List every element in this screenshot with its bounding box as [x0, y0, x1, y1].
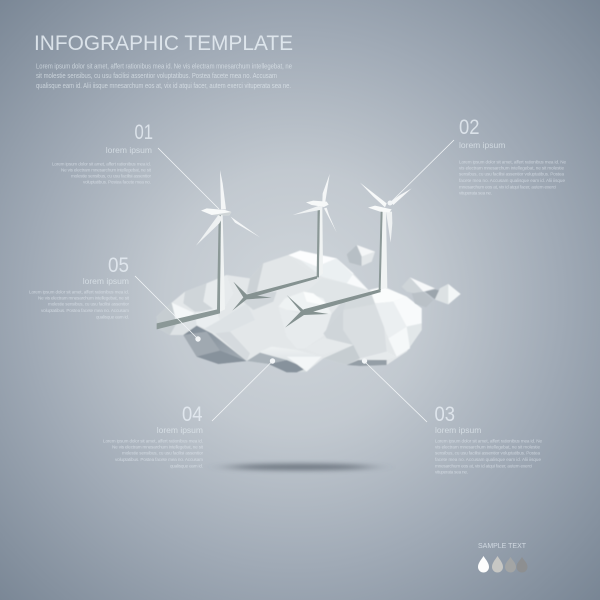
block 01: lorem ipsum — [106, 145, 152, 155]
block 04: molestie sensibus, cu usu facilisi assentior — [122, 450, 203, 456]
block 03: sensibus, cu usu facilisi assentior voluptatibus. Postea — [435, 450, 540, 456]
block 03: lorem ipsum — [435, 425, 481, 435]
turbine 2 — [293, 174, 337, 277]
block 05: qualisque eam id. — [96, 314, 129, 320]
ground shadow — [228, 464, 372, 470]
block 05: Ne vis electram mnesarchum intellegebat, ne sit — [38, 296, 130, 300]
cloud with wind turbines — [157, 170, 461, 372]
legend: sample text: SAMPLE TEXT — [478, 541, 526, 550]
block 05: lorem ipsum — [83, 276, 129, 286]
intro text block: Lorem ipsum dolor sit amet, affert rationibus mea id. Ne vis electram mnesarchum intellegebat, ne — [36, 64, 292, 70]
block 02: lorem ipsum — [459, 140, 505, 150]
block 04: voluptatibus. Postea facete mea no. Accusam — [115, 457, 203, 462]
block 02: vis electram mnesarchum intellegebat, ne sit molestie — [459, 166, 564, 170]
intro text block: sit molestie sensibus, cu usu facilisi assentior voluptatibus. Postea facete mea no. Accusam — [36, 73, 277, 80]
block 03 — [434, 403, 542, 474]
block 01: voluptatibus. Postea facete mea no. — [83, 180, 151, 184]
block 01: 01 — [134, 121, 153, 144]
leader line 05 — [135, 276, 201, 342]
block 04: lorem ipsum — [157, 425, 203, 435]
block 01: Lorem ipsum dolor sit amet, affert rationibus mea id. — [52, 162, 151, 166]
block 04 — [103, 403, 204, 468]
block 03: mnesarchum eos at, vix id atqui facer, autem exerci — [435, 464, 532, 468]
cable 1 and tail — [157, 309, 220, 329]
intro text block: qualisque eam id. Alii iisque mnesarchum eos at, vix id atqui facer, autem exerci vituperata sea ne. — [36, 83, 291, 90]
block 03: vis electram mnesarchum intellegebat, ne sit molestie — [435, 444, 540, 450]
block 04: 04 — [182, 403, 203, 426]
block 05 — [29, 254, 130, 320]
block 05: Lorem ipsum dolor sit amet, affert rationibus mea id. — [29, 290, 129, 294]
block 05: 05 — [108, 254, 129, 277]
cable 3 with fork — [285, 289, 381, 328]
block 02: sensibus, cu usu facilisi assentior voluptatibus. Postea — [459, 172, 564, 176]
block 01: molestie sensibus, cu usu facilisi assentior — [71, 174, 151, 178]
block 02: Lorem ipsum dolor sit amet, affert rationibus mea id. Ne — [459, 160, 566, 164]
cloud body — [157, 251, 422, 372]
small cloud pieces right — [347, 245, 461, 307]
block 01 — [52, 121, 153, 184]
block 04: Ne vis electram mnesarchum intellegebat, ne sit — [112, 444, 204, 450]
block 02: mnesarchum eos at, vix id atqui facer, autem exerci — [459, 184, 556, 190]
leader line 02 — [388, 140, 454, 206]
block 02: 02 — [459, 116, 480, 139]
block 02 — [459, 116, 566, 196]
leader line 03 — [362, 358, 427, 422]
cable 2 with fork — [232, 276, 317, 311]
block 03: vituperata sea ne. — [435, 470, 468, 474]
block 01: Ne vis electram mnesarchum intellegebat, ne sit — [61, 168, 152, 172]
block 05: molestie sensibus, cu usu facilisi assentior — [48, 302, 129, 306]
block 04: qualisque eam id. — [170, 464, 203, 468]
intro text block — [36, 64, 292, 90]
leader line 01 — [158, 148, 219, 209]
block 05: voluptatibus. Postea facete mea no. Accusam — [41, 308, 129, 313]
turbine 1 — [196, 170, 260, 312]
block 04: Lorem ipsum dolor sit amet, affert rationibus mea id. — [103, 438, 203, 444]
legend: drops — [478, 556, 528, 572]
block 03: facete mea no. Accusam qualisque eam id. Alii iisque — [435, 457, 541, 462]
block 03: Lorem ipsum dolor sit amet, affert rationibus mea id. Ne — [435, 438, 542, 444]
leader line 04 — [212, 358, 275, 421]
block 03: 03 — [434, 403, 455, 426]
turbine 3 — [360, 183, 412, 291]
block 02: facete mea no. Accusam qualisque eam id. Alii iisque — [459, 178, 565, 183]
block 02: vituperata sea ne. — [459, 190, 492, 196]
title: INFOGRAPHIC TEMPLATE — [34, 32, 293, 55]
